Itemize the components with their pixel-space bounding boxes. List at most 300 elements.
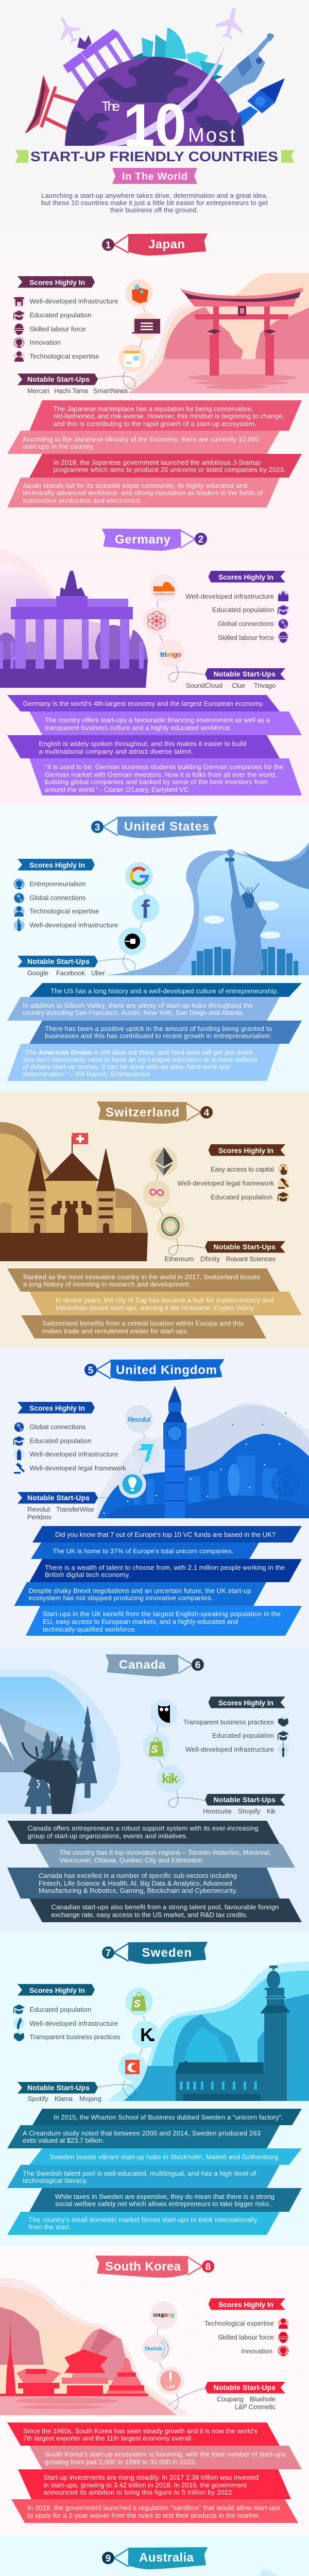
list: scores — [183, 1717, 289, 1757]
logo: Facebook: f — [141, 895, 150, 924]
fact 5 — [26, 1606, 302, 1636]
start-up logos chain — [143, 1700, 205, 1807]
logo: Ethereum — [155, 1147, 173, 1176]
fact 3: programme which aims to produce 20 unicorns or listed companies by 2023. — [54, 466, 286, 473]
fact 2: country including San Francisco, Austin, New York, San Diego and Atlanta. — [23, 1009, 244, 1016]
fact 2: According to the Japanese Ministry of the Economy, there are currently 10,000 — [23, 435, 259, 443]
start-up names: Bluehole — [250, 2395, 276, 2403]
fact 4: Canadian start-ups also benefit from a strong talent pool, favourable foreign — [52, 1903, 279, 1911]
illustration: Big Ben and London skyline — [95, 1386, 309, 1518]
heading: scores highly in — [18, 859, 95, 871]
list labels: Educated population — [212, 606, 274, 614]
icon: person — [13, 906, 25, 917]
country ribbon: Australia — [102, 2547, 208, 2569]
country ribbon: Sweden: 7 — [106, 1948, 111, 1959]
start-up names: TransferWise — [56, 1505, 94, 1513]
icon: graduation cap — [278, 605, 289, 615]
heading: scores highly in: Scores Highly In — [29, 1404, 85, 1412]
start-up names: Facebook — [56, 969, 85, 977]
logo: Spotify — [131, 1992, 146, 2011]
country ribbon: Sweden — [102, 1942, 208, 1964]
fact 3: There has been a positive uptick in the amount of funding being granted to — [45, 1025, 272, 1032]
title: The 10 Most: The — [101, 98, 120, 114]
fact 3: British digital tech economy. — [45, 1571, 130, 1579]
list labels: Well-developed infrastructure — [29, 2020, 118, 2027]
fact 4 — [7, 2165, 280, 2188]
icon: graduation cap — [13, 2004, 25, 2014]
fact 1: Ranked as the most innovative country in the world in 2017, Switzerland boasts — [23, 1273, 261, 1281]
icon: town hall — [278, 590, 288, 602]
list labels: Well-developed infrastructure — [185, 1745, 274, 1753]
fact 3: makes trade and recruitment easier for start-ups. — [42, 1327, 188, 1335]
logo: Bluehole — [145, 2340, 168, 2359]
fact 5: Start-ups in the UK benefit from the largest English-speaking population in the — [43, 1610, 281, 1618]
fact 1: The Japanese marketplace has a reputation for being conservative, — [54, 405, 253, 413]
heading: scores highly in — [208, 2298, 285, 2310]
start-up names: Roivant Sciences — [226, 1255, 276, 1263]
fact 1 — [32, 1526, 302, 1543]
start-up names — [28, 2095, 101, 2103]
country ribbon: Australia: 9 — [106, 2553, 111, 2564]
fact 2 — [29, 2446, 302, 2469]
logo: Roivant Sciences — [162, 1217, 179, 1235]
start-up names: SoundCloud — [186, 682, 222, 689]
list: scores — [185, 590, 289, 643]
icon: hand — [278, 1164, 288, 1175]
start-up names: Klarna — [55, 2095, 73, 2103]
heading: notable start-ups: Notable Start-Ups — [27, 375, 90, 383]
fact 3: Start-up investments are rising steadily. In 2017 2.38 trillion was invested — [44, 2473, 259, 2481]
list labels: Entrepreneurialism — [29, 880, 85, 888]
logo: Coupang: coupang — [153, 2311, 175, 2318]
logo: Hachi Tama — [132, 319, 160, 334]
fact 4: German market with German investors. Now it is folks from all over the world, — [45, 771, 277, 778]
country ribbon: Germany — [102, 529, 207, 551]
facts — [7, 2422, 302, 2523]
logo: trivago: trivago — [160, 650, 181, 658]
logo: Google — [131, 868, 147, 884]
fact 4: In 2018, the government launched a regulation "sandbox" that would allow start-ups — [27, 2504, 280, 2512]
start-up names: Dfinity — [200, 1255, 220, 1263]
country ribbon: Australia: Australia — [139, 2551, 194, 2565]
panel: Sweden — [7, 1942, 309, 2235]
logo: Perkbox — [123, 1475, 142, 1494]
icon: graduation cap — [13, 1435, 25, 1447]
start-up names — [186, 682, 276, 689]
fact 2: South Korea's start-up ecosystem is booming, with the total number of start-ups — [45, 2450, 286, 2458]
globe — [65, 57, 244, 146]
fact 3 — [7, 735, 280, 758]
facts — [7, 400, 302, 507]
subtitle ribbon: in the world: In The World — [122, 171, 187, 182]
fact 1 — [7, 1821, 280, 1844]
list labels: Well-developed infrastructure — [29, 921, 118, 929]
landmark: Statue of Liberty — [219, 33, 274, 96]
list labels: Educated population — [29, 2006, 91, 2013]
fact 3: Canada has excelled in a number of specific sub-sectors including — [39, 1872, 237, 1879]
heading: scores highly in — [18, 1984, 95, 1996]
country ribbon: Canada: Canada — [119, 1658, 166, 1672]
list labels — [29, 297, 118, 360]
country ribbon: Sweden: Sweden — [142, 1946, 192, 1960]
heading: scores highly in — [208, 1144, 285, 1156]
fact 2: growing from just 2,000 in 1999 to 30,000 in 2015. — [45, 2458, 197, 2466]
fact 2 — [31, 1543, 259, 1559]
start-up names — [27, 387, 128, 395]
start-up logos chain — [98, 862, 160, 972]
flight path — [93, 43, 225, 146]
country ribbon: South Korea: South Korea — [105, 2260, 181, 2274]
heading: notable start-ups: Notable Start-Ups — [27, 957, 90, 965]
logo: Spotify: S — [133, 1998, 141, 2010]
heading: scores highly in — [208, 1697, 285, 1708]
list: scores — [204, 2318, 288, 2357]
list labels: Technological expertise — [204, 2319, 274, 2327]
start-up names: Shopify — [238, 1807, 261, 1815]
country ribbon: Japan — [102, 233, 208, 256]
fact 2 — [36, 1844, 295, 1868]
start-up names: Google — [27, 969, 48, 977]
fact 4: "The American Dream is still alive out there, and hard work will get you there. — [23, 1048, 254, 1056]
fact 1: group of start-up organizations, events and initiatives. — [28, 1832, 188, 1840]
fact 3: Manufacturing & Robotics, Gaming, Blockchain and Cybersecurity. — [39, 1887, 237, 1894]
logo: SmartNews — [124, 351, 140, 367]
start-up logos chain — [98, 279, 160, 389]
heading: notable start-ups — [205, 2382, 285, 2394]
heading: scores highly in: Scores Highly In — [29, 278, 85, 286]
logo: SoundCloud: SOUNDCLOUD — [154, 593, 174, 596]
fact 4 — [14, 1582, 266, 1606]
fact 5: technically-qualified workforce. — [43, 1625, 136, 1633]
list: scores — [13, 2004, 121, 2042]
list labels — [29, 880, 118, 929]
landmark: Brandenburg Gate — [63, 29, 135, 95]
country ribbon: Germany: 2 — [198, 534, 203, 545]
fact 4: of dollars start-up money. It can be done with an idea, hard work and — [23, 1063, 230, 1071]
panel: United Kingdom — [13, 1359, 309, 1636]
panel: Germany — [0, 529, 302, 795]
country ribbon: Switzerland — [97, 1101, 213, 1124]
fact 3 — [29, 2148, 302, 2165]
landmark: Big Ben — [237, 78, 285, 126]
title: The 10 Most: 10 — [123, 91, 186, 159]
list: scores — [13, 1422, 126, 1473]
title: The 10 Most: Most — [188, 125, 235, 146]
fact 4: technically advanced workforce, and strong reputation as leaders in the fields of — [23, 489, 263, 497]
logo: kik: kik — [162, 1771, 179, 1786]
list labels — [183, 1718, 274, 1753]
list labels: Skilled labour force — [29, 325, 85, 333]
start-up names: Trivago — [254, 682, 276, 689]
start-up names: Coupang — [217, 2395, 244, 2403]
fact 3: Switzerland benefits from a central location within Europe and this — [42, 1319, 244, 1327]
fact 6: from the start. — [29, 2223, 71, 2231]
start-up logos chain — [98, 1988, 160, 2097]
facts — [7, 1821, 302, 1922]
start-up names — [27, 1505, 94, 1521]
logo: Klarna: K. — [140, 2024, 156, 2045]
heading: notable start-ups: Notable Start-Ups — [213, 1243, 276, 1251]
logo: Bluehole: Bluehole — [145, 2346, 163, 2352]
fact 1 — [7, 1268, 280, 1292]
fact 2: blockchain-based start-ups, earning it the nickname 'Crypto Valley.' — [56, 1304, 256, 1312]
facts — [7, 695, 302, 795]
fact 4: Japan stands out for its sizeable expat community, its highly educated and — [23, 482, 247, 489]
fact 2 — [7, 997, 280, 1021]
country ribbon: Switzerland: Switzerland — [106, 1106, 179, 1120]
fact 2: start-ups in the country. — [23, 443, 94, 450]
list labels: Well-developed legal framework — [29, 1464, 126, 1472]
start-up names: Spotify — [28, 2095, 48, 2103]
heading: scores highly in: Scores Highly In — [218, 1699, 273, 1707]
fact 4: determination." – Bill Rancic, Entrepreneur — [23, 1070, 151, 1078]
fact 3: There is a wealth of talent to choose from, with 2.1 million people working in the — [45, 1564, 285, 1571]
list labels: Well-developed legal framework — [177, 1179, 274, 1187]
fact 5 — [29, 2188, 302, 2212]
heading: notable start-ups: Notable Start-Ups — [27, 1494, 90, 1502]
fact 3 — [7, 1868, 280, 1899]
logo: Dfinity — [147, 1190, 166, 1202]
icon: handshake — [278, 1717, 288, 1727]
fact 4: technological literacy. — [23, 2177, 88, 2184]
country ribbon: United Kingdom: 5 — [88, 1365, 94, 1376]
list labels — [29, 2006, 121, 2041]
icon: torii — [13, 296, 25, 307]
fact 3: announced its ambition to bring this figure to 5 trillion by 2022. — [44, 2488, 234, 2496]
logo: Hootsuite — [158, 1705, 170, 1723]
list labels: Technological expertise — [29, 352, 99, 360]
illustration: world landmarks — [24, 4, 285, 146]
list labels: Educated population — [29, 1437, 91, 1445]
start-up names — [165, 1255, 276, 1263]
intro text: Launching a start-up anywhere takes drive, determination and a great idea, — [41, 192, 268, 199]
list: scores — [13, 296, 118, 362]
start-up logos chain — [143, 574, 205, 682]
illustration: Stockholm City Hall — [108, 1961, 309, 2101]
logo: Mojang — [125, 2060, 140, 2074]
illustration: Sydney Opera House — [94, 2569, 309, 2576]
fact 2: The country offers start-ups a favourable financing environment as well as a — [45, 716, 270, 724]
list labels — [177, 1165, 274, 1201]
icon: bulb — [13, 337, 25, 348]
list labels: Transparent business practices — [183, 1718, 274, 1726]
fact 2: A Creandum study noted that between 2000 and 2014, Sweden produced 263 — [23, 2129, 261, 2137]
flight path: left — [75, 42, 102, 73]
fact 6 — [7, 2212, 280, 2235]
country ribbon: United States: United States — [124, 820, 209, 834]
country ribbon: South Korea: 8 — [205, 2262, 211, 2273]
start-up names: Clue — [232, 682, 245, 689]
fact 4: automotive production and electronics. — [23, 497, 142, 504]
icon: map of Sweden — [13, 2017, 25, 2029]
start-up names: Perkbox — [27, 1513, 52, 1521]
heading: scores highly in: Scores Highly In — [218, 573, 273, 581]
icon: globe — [13, 892, 25, 904]
fact 3: businesses and this has contributed to recent growth in entrepreneurialism. — [45, 1032, 272, 1040]
fact 4: You don't necessarily need to have an Ivy League education or to have millions — [23, 1056, 258, 1063]
icon: hard hat — [278, 632, 288, 643]
icon: bulb — [13, 879, 25, 889]
fact 2: exits valued at $23.7 billion. — [23, 2137, 104, 2144]
start-up names: SmartNews — [93, 387, 128, 395]
fact 1 — [7, 2422, 280, 2446]
fact 4 — [7, 478, 280, 507]
start-up names: Uber — [91, 969, 106, 977]
fact 5: While taxes in Sweden are expensive, they do mean that there is a strong — [55, 2193, 274, 2200]
landmark: Sydney Opera House — [131, 27, 224, 80]
logo: Revolut: Revolut — [128, 1415, 151, 1423]
icon: graduation cap — [278, 1730, 289, 1741]
heading: scores highly in: Scores Highly In — [218, 2300, 273, 2309]
intro text — [41, 192, 268, 214]
panel: South Korea — [0, 2256, 302, 2523]
heading: notable start-ups: Notable Start-Ups — [27, 2083, 90, 2092]
logo: Mercari — [132, 284, 148, 303]
fact 1: In 2015, the Wharton School of Business dubbed Sweden a "unicorn factory". — [54, 2113, 283, 2121]
fact 3: Sweden boasts vibrant start-up hubs in Stockholm, Malmö and Gothenburg. — [49, 2153, 280, 2161]
fact 4: "It is used to be: German business students building German companies for the — [45, 763, 283, 771]
list labels: Global connections — [29, 894, 86, 902]
title: The 10 Most — [101, 91, 235, 159]
fact 1 — [7, 695, 280, 711]
list labels — [185, 592, 274, 641]
fact 3 — [21, 1315, 266, 1338]
logo: L&amp;P Cosmetic — [160, 2370, 181, 2391]
country ribbon: Canada: 6 — [195, 1660, 200, 1671]
facts — [7, 1268, 302, 1338]
panel: Australia — [11, 2547, 309, 2576]
country ribbon: United States — [91, 816, 218, 838]
intro text: their business off the ground. — [110, 206, 198, 214]
fact 1: a long history of investing in research and development. — [23, 1280, 191, 1288]
icon: CN tower — [278, 1741, 288, 1757]
heading: notable start-ups — [205, 1241, 285, 1253]
heading: notable start-ups — [18, 956, 98, 968]
fact 2 — [7, 2125, 280, 2148]
icon: globe — [13, 1422, 25, 1432]
list labels: Educated population — [212, 1732, 274, 1739]
start-up names — [27, 969, 106, 977]
heading: notable start-ups — [205, 1794, 285, 1805]
heading: scores highly in — [18, 1402, 95, 1414]
heading: scores highly in: Scores Highly In — [218, 1146, 273, 1155]
start-up logos chain — [143, 2301, 205, 2409]
fact 3: In 2018, the Japanese government launched the ambitious J-Startup — [54, 459, 261, 466]
heading: notable start-ups: Notable Start-Ups — [213, 1795, 276, 1804]
icon: statue — [13, 919, 25, 931]
start-up names: Revolut — [27, 1505, 50, 1513]
landmark: Torii gate — [24, 75, 78, 133]
fact 1: Since the 1960s, South Korea has seen steady growth and it is now the world's — [23, 2427, 258, 2435]
heading: scores highly in: Scores Highly In — [29, 861, 85, 869]
list labels: Global connections — [218, 620, 274, 628]
list labels: Skilled labour force — [218, 2333, 274, 2341]
heading: scores highly in — [18, 276, 95, 287]
logo: Dfinity: DFINITY — [147, 1199, 166, 1202]
start-up names: Kik — [267, 1807, 276, 1815]
fact 2: The UK is home to 37% of Europe's total unicorn companies. — [53, 1547, 234, 1555]
icon: hard hat — [278, 2332, 288, 2343]
country ribbon: United Kingdom — [84, 1359, 225, 1381]
country ribbon: Germany: Germany — [115, 533, 171, 547]
fact 2: In addition to Silicon Valley, there are plenty of start-up hubs throughout the — [23, 1002, 253, 1009]
fact 1 — [32, 2109, 302, 2125]
start-up names: Ethereum — [165, 1255, 194, 1263]
fact 4: ecosystem has not stopped producing innovative companies. — [29, 1594, 213, 1602]
icon: person — [278, 2318, 288, 2329]
icon: graduation cap — [278, 1191, 289, 1202]
icon: clock tower — [13, 1449, 25, 1460]
logo: Shopify: S — [151, 1744, 158, 1755]
intro text: but these 10 countries make it just a little bit easier for entrepreneurs to get — [41, 199, 268, 207]
fact 4: The Swedish talent pool is well-educated, multilingual, and has a high level of — [23, 2170, 256, 2177]
fact 3 — [29, 1021, 302, 1044]
icon: handshake — [13, 2031, 25, 2042]
illustration: Statue of Liberty — [105, 842, 309, 975]
fact 1: 7th largest exporter and the 11th largest economy overall. — [23, 2434, 193, 2442]
facts — [14, 1526, 302, 1636]
logo: Clue — [148, 612, 165, 630]
list labels — [29, 1423, 126, 1472]
heading: scores highly in — [208, 571, 285, 582]
heading: notable start-ups — [18, 1492, 98, 1503]
panel: Japan — [7, 233, 309, 507]
logo: SoundCloud — [153, 582, 175, 596]
list labels: Well-developed infrastructure — [29, 297, 118, 305]
list: scores — [177, 1164, 289, 1202]
fact 1 — [29, 400, 302, 431]
fact 4 — [29, 758, 302, 795]
fact 4: exchange rate, easy access to the US market, and R&D tax credits. — [52, 1911, 248, 1919]
illustration: moose and pines — [0, 1670, 120, 1814]
list: scores — [13, 879, 118, 931]
panel: Switzerland — [0, 1101, 302, 1338]
fact 2: transparent business culture and a highly educated workforce. — [45, 724, 232, 732]
fact 4: building global companies and backed by some of the best investors from — [45, 778, 268, 786]
fact 3: a multinational company and attract diverse talent. — [39, 748, 193, 755]
country ribbon: Japan: 1 — [106, 240, 111, 251]
fact 3 — [29, 1559, 302, 1582]
heading: notable start-ups — [205, 668, 285, 680]
fact 5: EU, easy access to European markets, and a highly-educated and — [43, 1618, 238, 1625]
fact 2 — [29, 711, 302, 735]
list labels: Easy access to capital — [211, 1165, 274, 1173]
fact 1: old-fashioned, and risk-averse. However, this mindset is beginning to change, — [54, 412, 284, 420]
illustration: castle — [0, 1122, 148, 1261]
country ribbon: Canada — [106, 1654, 204, 1676]
country ribbon: United States: 3 — [95, 822, 100, 833]
fact 1: Did you know that 7 out of Europe's top 10 VC funds are based in the UK? — [55, 1531, 276, 1538]
list labels: Innovation — [29, 338, 61, 346]
start-up logos chain — [143, 1147, 205, 1255]
illustration: torii gate — [115, 273, 309, 393]
start-up names: Mojang — [79, 2095, 101, 2103]
country ribbon: Japan: Japan — [148, 238, 185, 251]
icon: globe — [278, 618, 288, 630]
country ribbon: United Kingdom: United Kingdom — [116, 1363, 217, 1377]
start-up names — [203, 1807, 276, 1815]
fact 1 — [29, 983, 302, 997]
panel: United States — [7, 816, 309, 1081]
start-up names: Mercari — [27, 387, 49, 395]
fact 4: Despite shaky Brexit negotiations and an uncertain future, the UK start-up — [29, 1587, 251, 1595]
subtitle ribbon: in the world — [112, 168, 197, 184]
icon: gavel — [14, 1463, 25, 1473]
fact 3 — [29, 454, 302, 478]
fact 1: The US has a long history and a well-developed culture of entrepreneurship. — [50, 987, 279, 995]
icon: graduation cap — [13, 310, 25, 320]
fact 6: The country's small domestic market forces start-ups to think internationally — [29, 2216, 258, 2224]
